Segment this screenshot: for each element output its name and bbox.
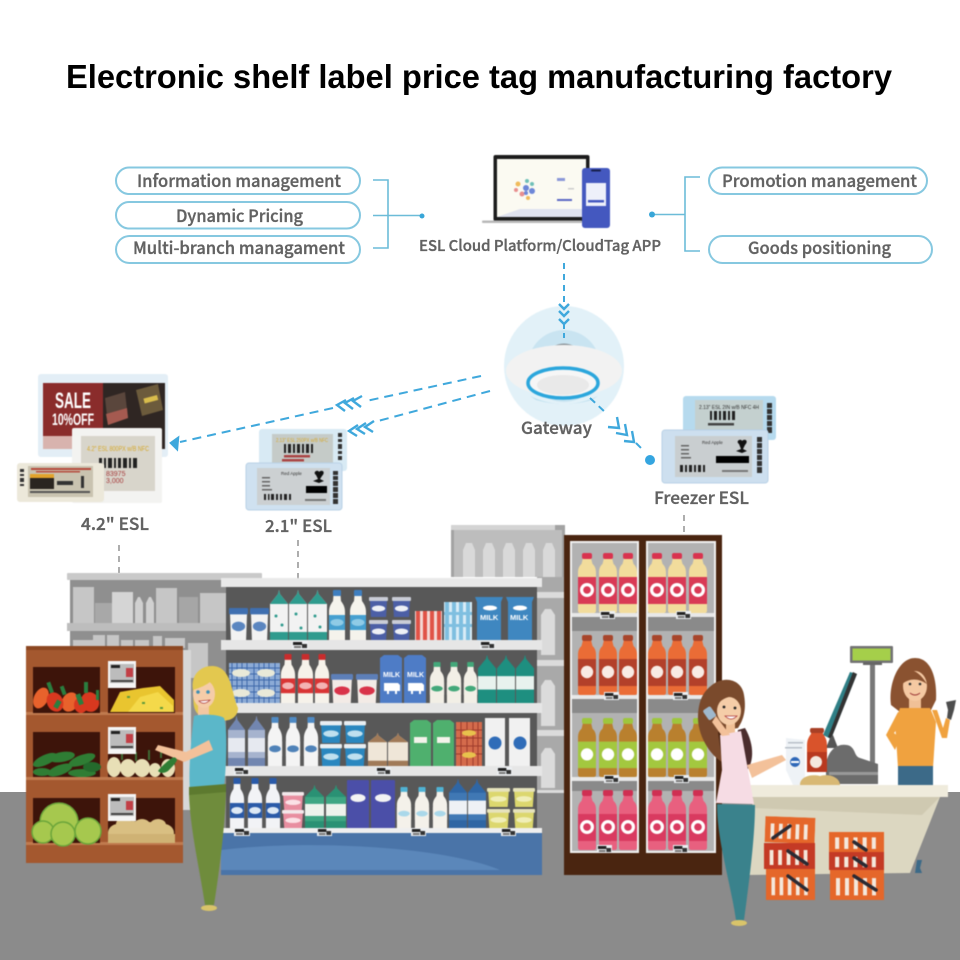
produce: yellow fruit: [110, 686, 174, 712]
products row 4: [230, 778, 535, 828]
icon: front tag: Red Apple: [281, 471, 302, 476]
arrow: cloud to gateway: [559, 263, 569, 340]
icon: large tablet display: SALE: [55, 388, 91, 413]
juice row 3: green: [578, 718, 707, 777]
icon: gateway device: [504, 306, 624, 426]
icon: back tag: 2.13" ESL 250PX w/B NFC: [276, 438, 328, 444]
panel: main dairy shelf: [221, 578, 542, 875]
arrow: gateway to 4.2 inch ESL: [171, 376, 481, 449]
products row 2: [229, 654, 534, 703]
pill: information management: Information management: [137, 167, 341, 192]
ESL tags on stand: [108, 661, 136, 821]
icon: small yellow tag: [17, 463, 104, 502]
icon: 4.2 inch tag: 3,000: [106, 478, 124, 485]
panel: drinks fridge: [564, 535, 722, 875]
leader lines from labels to store: [119, 515, 684, 590]
pill: multi-branch management: Multi-branch managament: [133, 234, 345, 259]
panel: grey back shelf, left: [67, 573, 262, 810]
items on counter: bottle, bread and receipt: [785, 728, 840, 785]
figure: blonde shopper: [155, 666, 238, 911]
icon: shopping baskets right: [829, 832, 884, 900]
figure: shopper with phone: [698, 680, 786, 926]
products row 1: MILK: [480, 613, 499, 622]
shelf board 3: [221, 766, 542, 776]
icon: 4.2 inch tag: 83975: [106, 471, 126, 478]
panel: checkout counter: [747, 785, 948, 875]
label: 2.1 inch ESL: 2.1" ESL: [265, 512, 332, 537]
shelf board 2: [221, 703, 542, 713]
icon: large tablet display: 10%OFF: [52, 410, 94, 429]
pill: promotion management: Promotion management: [722, 167, 917, 192]
icon: large tablet display: [38, 374, 168, 457]
pill: goods positioning: Goods positioning: [748, 234, 891, 259]
bracket connector: left: [373, 180, 424, 248]
label: 4.2 inch ESL: 4.2" ESL: [81, 510, 149, 535]
title: Electronic shelf label price tag manufacturing factory: [66, 58, 893, 95]
panel: grey back shelf, right: [451, 525, 565, 793]
label: freezer ESL: Freezer ESL: [654, 484, 749, 509]
ESL tags on shelves: [234, 641, 516, 836]
panel: left feature pills: [116, 167, 360, 263]
icon: shopping baskets left: [764, 816, 815, 900]
bracket connector: right: [649, 177, 700, 251]
produce: onions: [107, 750, 175, 777]
icon: 4.2 inch tag: [72, 428, 162, 503]
produce: cabbages: [32, 803, 101, 846]
panel: 2.1 inch ESL group: [246, 429, 347, 537]
store scene: [26, 525, 956, 926]
shelf base: [221, 833, 542, 875]
products row 2: MILK: [407, 672, 424, 679]
shelf board 4: [221, 828, 542, 833]
arrow: gateway to 2.1 inch ESL: [349, 391, 490, 436]
figure: cashier: [886, 658, 956, 787]
products row 2: MILK: [383, 672, 400, 679]
produce: cucumbers: [31, 750, 101, 779]
pill: dynamic pricing: [116, 202, 360, 228]
pill: goods positioning: [709, 234, 932, 263]
pill: dynamic pricing: Dynamic Pricing: [176, 202, 303, 227]
icon: back tag: 2.13" ESL 2IN w/B NFC 4H: [699, 405, 759, 411]
icon: laptop and phone: [482, 155, 610, 228]
panel: 4.2 inch ESL group: [17, 374, 168, 535]
juice row 1: red: [578, 553, 707, 613]
label: cloud platform: ESL Cloud Platform/CloudTag APP: [419, 235, 661, 256]
products row 1: [229, 590, 534, 640]
juice row 4: pink: [578, 790, 707, 850]
icon: POS terminal: [823, 646, 893, 784]
ESL tags in fridge: [597, 611, 691, 853]
produce: potatoes: [108, 818, 175, 843]
juice row 2: orange: [578, 635, 707, 695]
produce: carrots and tomatoes: [30, 682, 102, 715]
products row 3: [228, 716, 530, 766]
panel: freezer ESL group: [654, 396, 776, 509]
products row 1: MILK: [510, 613, 529, 622]
panel: produce stand: [26, 646, 183, 863]
arrow: gateway to freezer ESL: [590, 398, 655, 465]
shelf board 1: [221, 640, 542, 650]
panel: right feature pills: [709, 167, 932, 263]
icon: 4.2 inch tag: 4.2" ESL 800PX w/B NFC: [87, 446, 149, 453]
label: gateway: Gateway: [521, 414, 593, 439]
icon: front tag: Red Apple: [702, 440, 723, 445]
floor: [0, 792, 960, 960]
